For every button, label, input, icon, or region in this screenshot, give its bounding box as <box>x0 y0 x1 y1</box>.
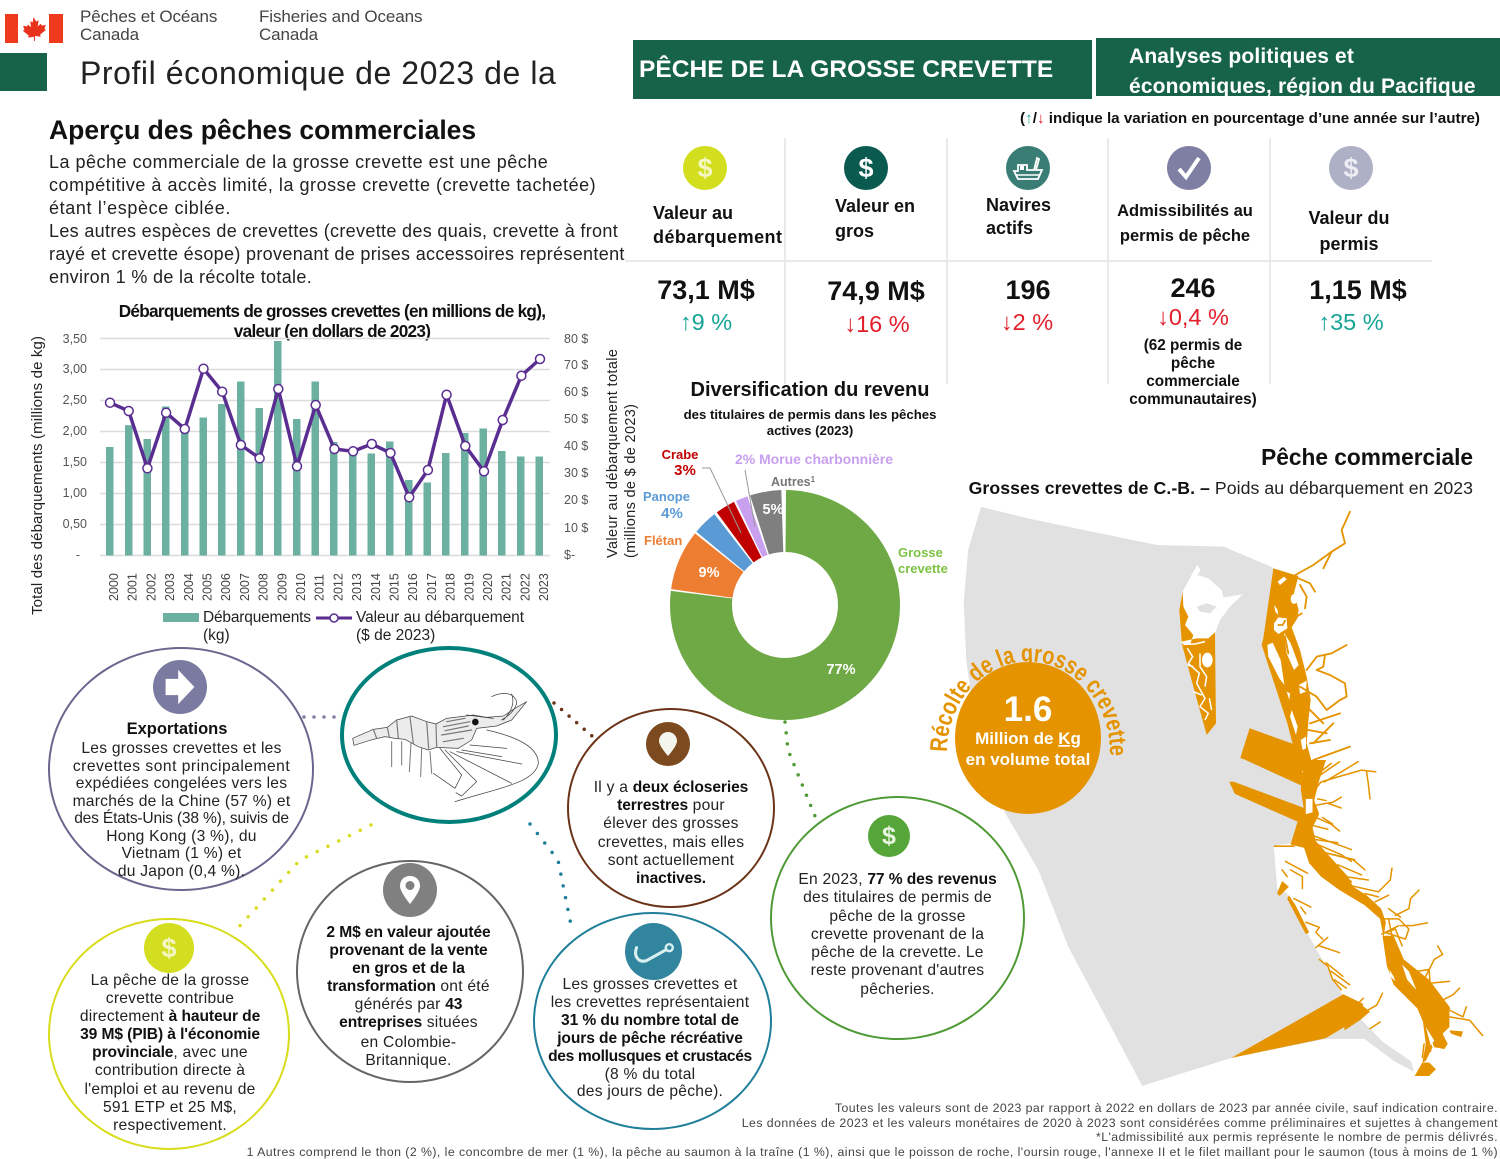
year labels: 2023 <box>537 573 551 601</box>
map: southern coast and Vancouver Island <box>1274 760 1483 1076</box>
hatcheries text: inactives. <box>636 870 706 887</box>
label: landed value: débarquement <box>653 227 782 247</box>
value added text: en Colombie- <box>361 1034 456 1051</box>
year labels: 2021 <box>500 573 514 601</box>
legend: year over year variation: (↑/↓ indique la variation en pourcentage d’une année sur l’autre) <box>1020 110 1480 127</box>
left axis tick labels: 1,50 <box>63 455 87 469</box>
year labels: 2009 <box>275 573 289 601</box>
exports text <box>73 740 290 880</box>
recreational fishing text: des jours de pêche). <box>577 1083 723 1100</box>
recreational fishing text <box>548 976 752 1100</box>
connector dots: income diversification <box>783 720 817 818</box>
year labels: 2013 <box>350 573 364 601</box>
right axis tick labels: $- <box>564 548 575 562</box>
year labels: 2017 <box>425 573 439 601</box>
provincial economy text: provinciale, avec une <box>92 1044 248 1061</box>
hatcheries text <box>594 779 748 887</box>
left axis tick labels: 0,50 <box>63 517 87 531</box>
recreational fishing text: (8 % du total <box>605 1066 695 1083</box>
icon: wholesale value dollar: $ <box>858 152 874 182</box>
left axis tick labels: 1,00 <box>63 486 87 500</box>
value added text <box>326 924 491 1069</box>
left axis title: Total des débarquements (millions de kg) <box>29 336 46 615</box>
slice value: 9%: 9% <box>699 565 720 581</box>
label: large shrimp, second line: crevette <box>898 561 948 576</box>
year labels: 2019 <box>462 573 476 601</box>
year labels: 2001 <box>126 573 140 601</box>
footnote: preliminary data: Les données de 2023 et les valeurs monétaires de 2020 à 2023 sont considérées comme préliminaires et sujettes à changement <box>742 1116 1498 1130</box>
banner: fishery name <box>633 40 1092 99</box>
chart title <box>119 301 545 341</box>
callout: harvest volume: Récolte de la grosse crevette <box>930 648 1126 756</box>
heading: commercial fisheries overview: Aperçu des pêches commerciales <box>49 115 476 145</box>
value added text: générés par 43 <box>355 996 462 1013</box>
year labels: 2004 <box>182 573 196 601</box>
left axis tick labels: - <box>76 548 80 562</box>
subheading: landed weight map: Grosses crevettes de C.-B. – Poids au débarquement en 2023 <box>969 478 1473 498</box>
English department name <box>259 7 422 44</box>
change: licence value up 35 %: ↑35 % <box>1318 309 1384 335</box>
panel: recreational fishing <box>533 912 772 1130</box>
mainland band <box>1241 568 1315 773</box>
label: wholesale value: Valeur en <box>835 196 915 216</box>
French department name <box>80 7 217 44</box>
panel: shrimp illustration <box>340 646 558 824</box>
value added text: Britannique. <box>365 1052 452 1069</box>
right axis tick labels: 70 $ <box>564 358 588 372</box>
exports text: expédiées congelées vers les <box>76 775 287 792</box>
note: communal commercial licences <box>1129 337 1257 408</box>
hatcheries text: terrestres pour <box>617 797 725 814</box>
exports text: du Japon (0,4 %). <box>118 862 245 880</box>
right axis tick labels: 30 $ <box>564 466 588 480</box>
label: active vessels: Navires <box>986 195 1051 215</box>
panel: revenue share <box>770 796 1025 1040</box>
panel: provincial economy <box>48 918 290 1150</box>
change: licence eligibilities down 0.4 %: ↓0,4 % <box>1157 304 1229 330</box>
right axis tick labels: 80 $ <box>564 332 588 346</box>
text block: overview paragraph: environ 1 % de la récolte totale. <box>49 267 312 287</box>
footnote: values basis: Toutes les valeurs sont de 2023 par rapport à 2022 en dollars de 2023 par année civile, sauf indication contraire. <box>835 1101 1498 1115</box>
page title: Profil économique de 2023 de la <box>80 55 556 91</box>
year labels: 2012 <box>331 573 345 601</box>
exports text: Les grosses crevettes et les <box>81 740 282 757</box>
label: licence eligibilities: permis de pêche <box>1120 227 1250 245</box>
hatcheries text: Il y a deux écloseries <box>594 779 748 796</box>
recreational fishing text: les crevettes représentaient <box>551 994 749 1011</box>
recreational fishing text: Les grosses crevettes et <box>562 976 738 993</box>
revenue text: pêche de la grosse <box>829 908 966 925</box>
label: licence value: Valeur du <box>1308 208 1390 228</box>
value: geoduck 4%: 4% <box>661 505 683 522</box>
right axis title: Valeur au débarquement totale <box>605 349 621 558</box>
label: wholesale value <box>835 196 915 241</box>
right axis tick labels: 60 $ <box>564 385 588 399</box>
year labels: 2016 <box>406 573 420 601</box>
note: communal commercial licences: communautaires) <box>1129 391 1257 408</box>
illustration: spot prawn line drawing <box>352 693 539 802</box>
hatcheries text: élever des grosses <box>603 815 739 832</box>
Haida Gwaii orange areas <box>1179 592 1216 735</box>
right axis tick labels: 50 $ <box>564 412 588 426</box>
left axis tick labels: 2,00 <box>63 424 87 438</box>
exports text: des États-Unis (38 %), suivis de <box>74 810 289 827</box>
English department name: Fisheries and Oceans <box>259 7 422 26</box>
year labels: 2010 <box>294 573 308 601</box>
legend: landings: Débarquements <box>203 609 311 626</box>
legend: landed value: Valeur au débarquement <box>356 609 525 626</box>
year labels: 2006 <box>219 573 233 601</box>
text block: overview paragraph: étant l’espèce ciblée. <box>49 198 231 218</box>
left axis tick labels: 2,50 <box>63 393 87 407</box>
leader lines <box>702 468 755 533</box>
hatcheries text: crevettes, mais elles <box>598 834 744 851</box>
icon: export arrow <box>153 660 207 714</box>
French department name: Pêches et Océans <box>80 7 217 26</box>
heading: income diversification: Diversification du revenu <box>691 379 929 401</box>
slice value: 5%: 5% <box>763 502 784 518</box>
provincial economy text: 39 M$ (PIB) à l'économie <box>80 1026 260 1043</box>
connector dots: provincial economy <box>238 823 373 928</box>
text block: overview paragraph: compétitive à accès limité, la grosse crevette (crevette tachetée) <box>49 175 596 195</box>
right axis tick labels <box>564 332 588 562</box>
connector dots: hatcheries <box>552 701 594 738</box>
revenue text: crevette provenant de la <box>811 926 984 943</box>
year labels: 2011 <box>313 574 327 601</box>
exports text: crevettes sont principalement <box>73 758 290 774</box>
subheading: licence holders: des titulaires de permis dans les pêches <box>684 407 936 422</box>
icon: licence value dollar: $ <box>1343 152 1359 182</box>
icon: fish hook <box>625 923 682 980</box>
icon: landed value dollar <box>683 146 727 190</box>
year labels: 2020 <box>481 573 495 601</box>
provincial economy text: 591 ETP et 25 M$, <box>103 1099 237 1116</box>
label: landed value: Valeur au <box>653 203 733 223</box>
revenue text <box>798 871 997 998</box>
icon: grey location pin <box>383 863 437 917</box>
provincial economy text: directement à hauteur de <box>80 1008 260 1025</box>
year labels: 2022 <box>518 573 532 601</box>
table dividers <box>625 138 1432 384</box>
orange fjords <box>1274 762 1483 1057</box>
provincial economy text: La pêche de la grosse <box>91 972 249 989</box>
value: active vessels 196: 196 <box>1005 275 1051 305</box>
text block: overview paragraph <box>49 152 625 287</box>
text block: overview paragraph: Les autres espèces de crevettes (crevette des quais, crevette à front <box>49 221 618 241</box>
left axis tick labels <box>63 332 87 562</box>
footnote: others definition: 1 Autres comprend le thon (2 %), le concombre de mer (1 %), la pêche au saumon à la traîne (1 %), ainsi que le poisson de roche, l'oursin rouge, l'annexe II et le filet maillant pour le saumon (tous à moins de 1 %) <box>247 1145 1498 1159</box>
exports text: Hong Kong (3 %), du <box>106 828 257 844</box>
green title accent block <box>0 53 47 91</box>
English department name: Canada <box>259 24 318 44</box>
icon: brown location marker <box>646 722 690 766</box>
value added text: entreprises situées <box>339 1014 478 1031</box>
revenue text: des titulaires de permis de <box>803 889 992 906</box>
left axis tick labels: 3,00 <box>63 362 87 376</box>
panel: hatcheries <box>567 708 775 908</box>
value added text: transformation ont été <box>327 978 490 995</box>
icon: yellow dollar: $ <box>161 932 177 962</box>
year labels: 2005 <box>200 573 214 601</box>
label: crab: Crabe <box>662 447 698 462</box>
value added text: en gros et de la <box>352 960 465 977</box>
note: communal commercial licences: pêche <box>1171 355 1215 372</box>
exports heading: Exportations <box>127 720 227 738</box>
label: landed value <box>653 203 782 247</box>
change: active vessels down 2 %: ↓2 % <box>1001 309 1053 335</box>
provincial economy text: l'emploi et au revenu de <box>84 1081 256 1098</box>
year labels <box>107 573 551 601</box>
icon: licence eligibility check mark <box>1167 146 1211 190</box>
donut chart: income diversification <box>643 447 948 720</box>
exports text: marchés de la Chine (57 %) et <box>73 792 290 810</box>
legend: landings: (kg) <box>203 627 230 644</box>
text block: overview paragraph: rayé et crevette ésope) provenant de prises accessoires représentent <box>49 244 625 264</box>
subheading: licence holders <box>684 407 936 438</box>
value: wholesale value 74.9 M$: 74,9 M$ <box>827 276 925 306</box>
banner: policy and economics branch: Analyses politiques et <box>1129 45 1354 68</box>
connector dots: exports <box>302 715 336 719</box>
label: wholesale value: gros <box>835 221 874 241</box>
label: large shrimp: Grosse <box>898 545 943 560</box>
map: grey fishing zone and seaward harvest strips <box>964 507 1414 1086</box>
value added text: provenant de la vente <box>329 942 488 959</box>
legend: landings <box>163 609 311 644</box>
label: others: Autres <box>771 475 811 489</box>
right axis title, second line: (millions de $ de 2023) <box>623 404 639 558</box>
icon: green dollar <box>868 815 910 857</box>
callout: harvest volume <box>930 648 1126 814</box>
legend: landed value <box>316 609 525 644</box>
chart title: Débarquements de grosses crevettes (en millions de kg), <box>119 301 545 321</box>
label: active vessels <box>986 195 1051 238</box>
revenue text: En 2023, 77 % des revenus <box>798 871 997 888</box>
icon: Canadian flag <box>5 14 63 43</box>
icon: yellow dollar <box>144 923 194 973</box>
Haida Gwaii island <box>1179 565 1243 735</box>
icon: green dollar: $ <box>882 822 896 850</box>
recreational fishing text: 31 % du nombre total de <box>561 1012 739 1029</box>
banner: policy and economics branch <box>1096 38 1500 96</box>
change: wholesale value down 16 %: ↓16 % <box>844 311 910 337</box>
change: landed value up 9 %: ↑9 % <box>680 309 732 335</box>
harvest number: 1.6 <box>1004 690 1052 729</box>
revenue text: pêcheries. <box>860 981 935 998</box>
map: northern coast and Haida Gwaii <box>1179 512 1350 773</box>
line: landed value <box>110 359 540 497</box>
revenue text: pêche de la crevette. Le <box>811 944 984 961</box>
harvest unit: Million de Kg <box>975 729 1081 748</box>
icon: licence value dollar <box>1329 146 1373 190</box>
combo chart: landings bars and landed value line <box>29 332 639 644</box>
banner: fishery name: PÊCHE DE LA GROSSE CREVETTE <box>639 56 1053 83</box>
central coast body <box>1291 760 1386 937</box>
text block: overview paragraph: La pêche commerciale de la grosse crevette est une pêche <box>49 152 548 172</box>
left axis tick labels: 3,50 <box>63 332 87 346</box>
year labels: 2014 <box>369 573 383 601</box>
provincial economy text: crevette contribue <box>106 990 234 1007</box>
harvest description: en volume total <box>966 750 1090 769</box>
year labels: 2000 <box>107 573 121 601</box>
bars: landings <box>106 341 543 556</box>
islands in mainland band <box>1267 577 1307 750</box>
Strait of Georgia <box>1382 936 1449 1049</box>
grid lines <box>100 338 550 556</box>
right axis tick labels: 40 $ <box>564 439 588 453</box>
donut slices <box>701 521 869 689</box>
hatcheries text: sont actuellement <box>608 852 734 869</box>
icon: wholesale value dollar <box>844 146 888 190</box>
value: crab 3%: 3% <box>674 462 696 479</box>
right axis tick labels: 20 $ <box>564 493 588 507</box>
value added text: 2 M$ en valeur ajoutée <box>326 924 491 941</box>
provincial economy text <box>80 972 260 1134</box>
header logo: Canadian flag and department names <box>5 7 422 44</box>
icon: landed value dollar: $ <box>697 152 713 182</box>
harvest volume disc <box>955 662 1101 814</box>
right axis tick labels: 10 $ <box>564 521 588 535</box>
year labels: 2008 <box>257 573 271 601</box>
label: geoduck: Panope <box>643 489 690 504</box>
slice value: 77%: 77% <box>826 662 856 678</box>
French department name: Canada <box>80 24 139 44</box>
value: licence eligibilities 246: 246 <box>1170 273 1216 303</box>
label: licence value: permis <box>1319 234 1379 254</box>
recreational fishing text: des mollusques et crustacés <box>548 1048 752 1065</box>
panel: key indicators table <box>625 138 1432 408</box>
label: sablefish: 2% Morue charbonnière <box>735 451 893 467</box>
curved heading: large shrimp harvest <box>947 661 1110 752</box>
label: licence eligibilities <box>1117 202 1253 245</box>
provincial economy text: contribution directe à <box>95 1062 245 1079</box>
subheading: licence holders: actives (2023) <box>767 422 853 438</box>
note: communal commercial licences: commerciale <box>1146 373 1240 390</box>
exports text: Vietnam (1 %) et <box>122 845 241 862</box>
map: British Columbia landed weight <box>964 507 1484 1086</box>
panel: exports <box>48 647 314 891</box>
recreational fishing text: jours de pêche récréative <box>557 1030 743 1047</box>
year labels: 2002 <box>144 573 158 601</box>
label: active vessels: actifs <box>986 218 1033 238</box>
heading: commercial fishery: Pêche commerciale <box>1261 444 1473 470</box>
icon: active vessels boat <box>1006 146 1050 190</box>
label: halibut: Flétan <box>644 533 682 548</box>
label: others: 1 <box>811 475 816 484</box>
note: communal commercial licences: (62 permis de <box>1144 337 1242 354</box>
markers: landed value <box>106 354 544 502</box>
provincial economy text: respectivement. <box>113 1117 227 1134</box>
panel: value added <box>296 860 524 1083</box>
footnote: licence eligibility: *L'admissibilité aux permis représente le nombre de permis délivrés. <box>1096 1130 1498 1144</box>
year labels: 2015 <box>388 573 402 601</box>
label: licence value <box>1308 208 1390 254</box>
revenue text: reste provenant d'autres <box>811 962 984 979</box>
year labels: 2018 <box>444 573 458 601</box>
year labels: 2003 <box>163 573 177 601</box>
chart title: valeur (en dollars de 2023) <box>234 321 430 341</box>
connector dots: recreational fishing <box>528 822 572 923</box>
year labels: 2007 <box>238 573 252 601</box>
white islands <box>1306 799 1434 1046</box>
legend: landed value: ($ de 2023) <box>356 627 435 644</box>
value: landed value 73.1 M$: 73,1 M$ <box>657 275 755 305</box>
value: licence value 1.15 M$: 1,15 M$ <box>1309 275 1407 305</box>
label: licence eligibilities: Admissibilités au <box>1117 202 1253 220</box>
